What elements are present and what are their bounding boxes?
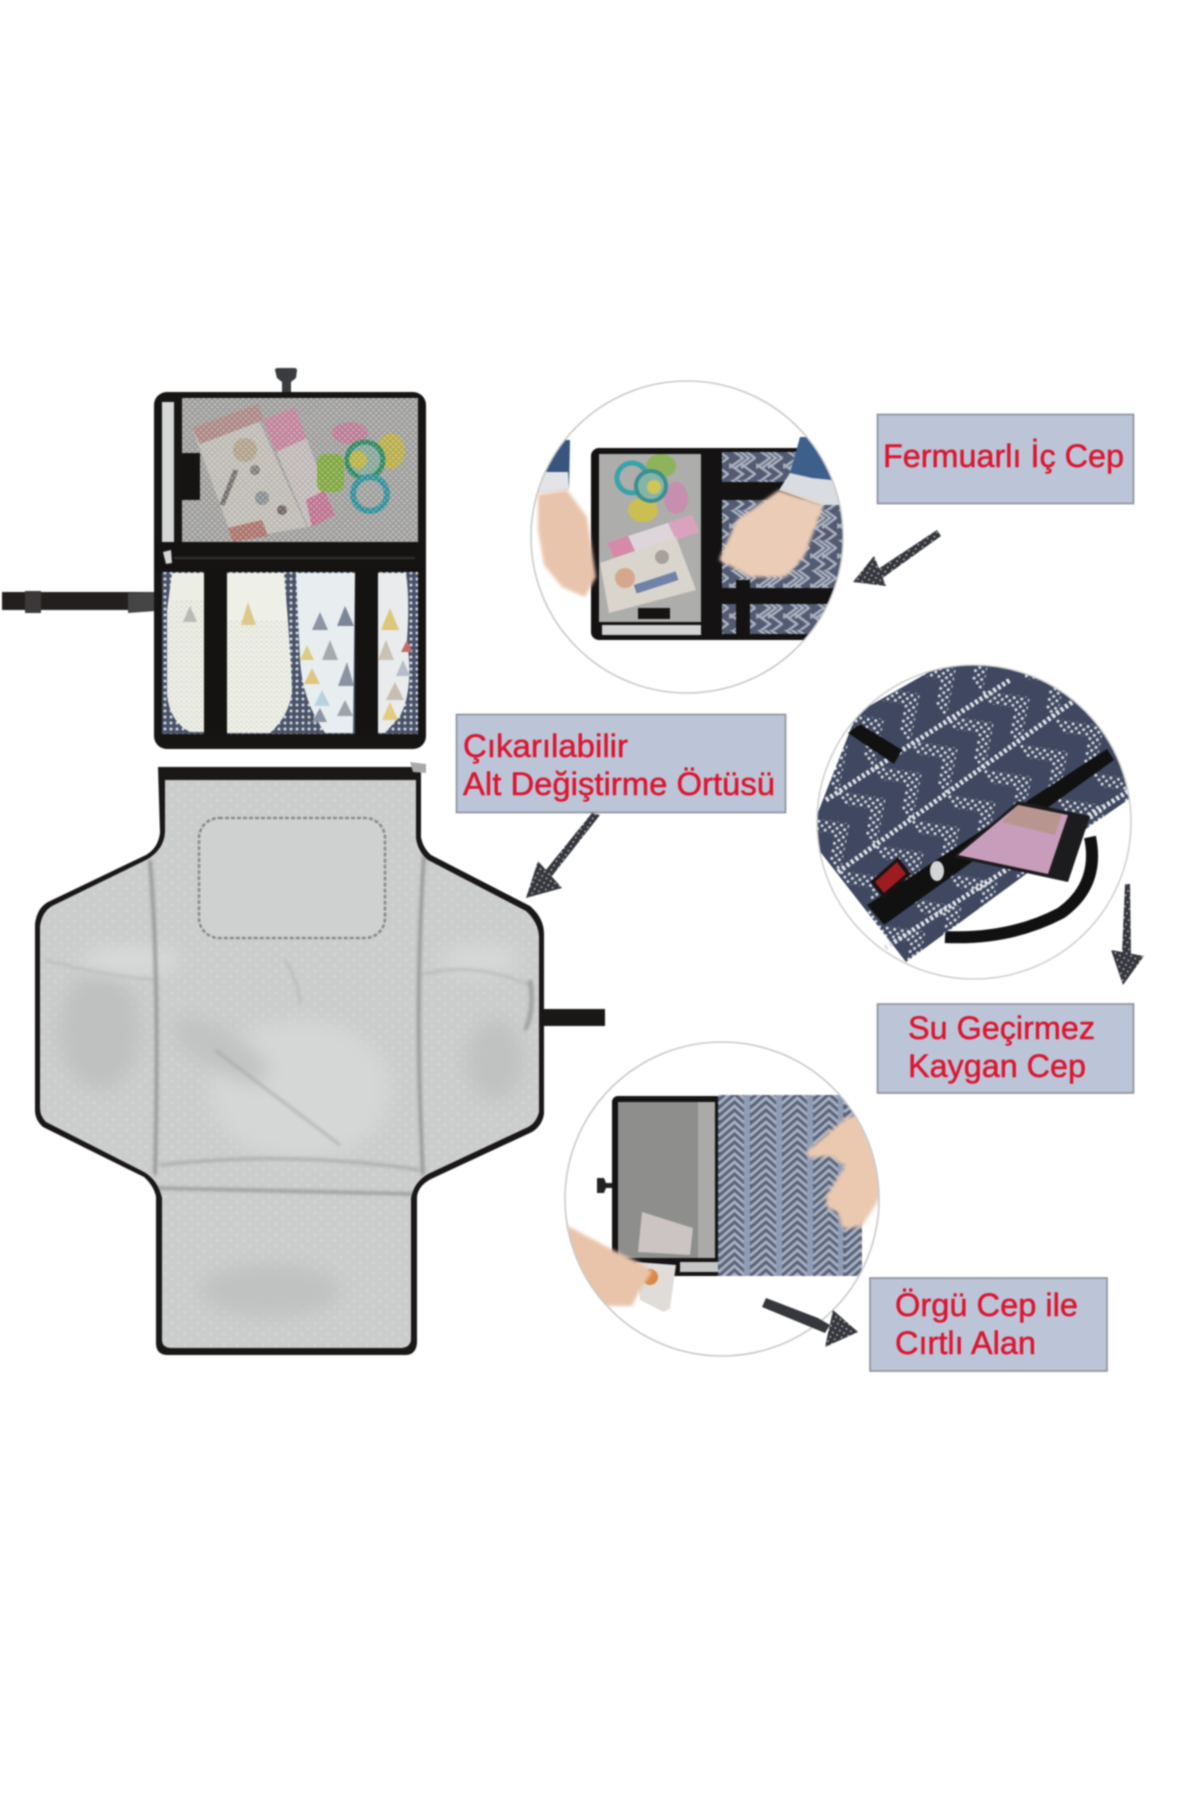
teether toy (317, 422, 405, 511)
label: Su Geçirmez Kaygan Cep (878, 1004, 1134, 1093)
arrow: toward changing mat (526, 813, 600, 898)
gray pocket interior (599, 454, 701, 622)
red brand label (870, 857, 911, 899)
zip pull on mat (410, 762, 426, 773)
label: Çıkarılabilir Alt Değiştirme Örtüsü: Çıkarılabilir (463, 728, 628, 764)
toy rings (617, 454, 688, 522)
colourful card spot (642, 1269, 658, 1285)
silver side strip (162, 402, 174, 542)
diaper prints (183, 602, 412, 722)
side tab (544, 1009, 605, 1026)
gray lining (617, 1101, 699, 1259)
left hand and sleeve (536, 439, 598, 598)
lower vertical strap (736, 580, 750, 640)
diapers (167, 573, 412, 733)
right hand (804, 1114, 879, 1230)
callout circle: waterproof slip pocket photo (815, 660, 1135, 979)
label: Su Geçirmez Kaygan Cep: Kaygan Cep (908, 1048, 1086, 1084)
label: Çıkarılabilir Alt Değiştirme Örtüsü: Alt Değiştirme Örtüsü (463, 766, 775, 802)
arrow: toward zip pocket circle (853, 530, 941, 586)
black velcro tab (182, 453, 200, 500)
mesh overlay (182, 398, 418, 542)
callout circle: mesh pocket and velcro area photo (565, 1042, 885, 1356)
side strap with buckle (2, 591, 164, 613)
patterned fabric (815, 660, 1135, 962)
lower pocket navy backing (162, 572, 418, 734)
arrow: toward mesh pocket label (762, 1298, 858, 1347)
organizer body (154, 392, 426, 749)
zipper pull (930, 861, 944, 881)
infographic canvas (1, 367, 1144, 1373)
wipes package (192, 404, 307, 542)
lower silver edge (680, 1262, 718, 1272)
zipper band (156, 542, 424, 572)
wipes (600, 537, 696, 613)
panel: top organizer with mesh pocket and diapers (2, 368, 426, 749)
knob on top edge (275, 368, 297, 393)
callout circle: zippered inner pocket photo (520, 381, 851, 693)
black handle tab (848, 724, 902, 764)
head pillow panel (199, 818, 385, 938)
organizer black frame (612, 1096, 722, 1276)
mesh pocket (182, 398, 418, 542)
patterned outer panel (718, 1095, 862, 1276)
label: Fermuarlı İç Cep: Fermuarlı İç Cep (883, 438, 1124, 474)
vertical elastic straps (204, 572, 378, 736)
silver strip (602, 625, 701, 635)
diaper speckle texture (167, 600, 292, 733)
arrow: toward waterproof pocket label (1111, 884, 1144, 985)
label: Fermuarlı İç Cep (878, 414, 1134, 504)
mat fold seams (45, 855, 532, 1194)
dotted diagonal stripes (826, 680, 1130, 948)
left hand (566, 1225, 652, 1306)
silver lining (30, 760, 550, 1360)
patterned panels (722, 452, 842, 634)
label: Örgü Cep ile Cırtlı Alan: Cırtlı Alan (895, 1325, 1036, 1361)
label: Örgü Cep ile Cırtlı Alan (870, 1278, 1107, 1371)
zipper opening (867, 749, 1114, 925)
label: Su Geçirmez Kaygan Cep: Su Geçirmez (908, 1010, 1095, 1046)
carrier strap (945, 837, 1092, 937)
tube (607, 515, 699, 558)
black pull tab (638, 608, 670, 619)
panel: removable changing mat (30, 760, 605, 1360)
cream tube (263, 407, 335, 527)
label: Çıkarılabilir Alt Değiştirme Örtüsü (456, 714, 786, 812)
mat outline (35, 767, 544, 1355)
side knob (597, 1178, 613, 1193)
organizer body in photo (591, 448, 851, 640)
card in left hand (636, 1262, 676, 1312)
right hand and sleeve (719, 437, 850, 577)
phone (953, 801, 1090, 882)
wipes in pocket (638, 1212, 693, 1255)
label: Örgü Cep ile Cırtlı Alan: Örgü Cep ile (895, 1287, 1078, 1323)
